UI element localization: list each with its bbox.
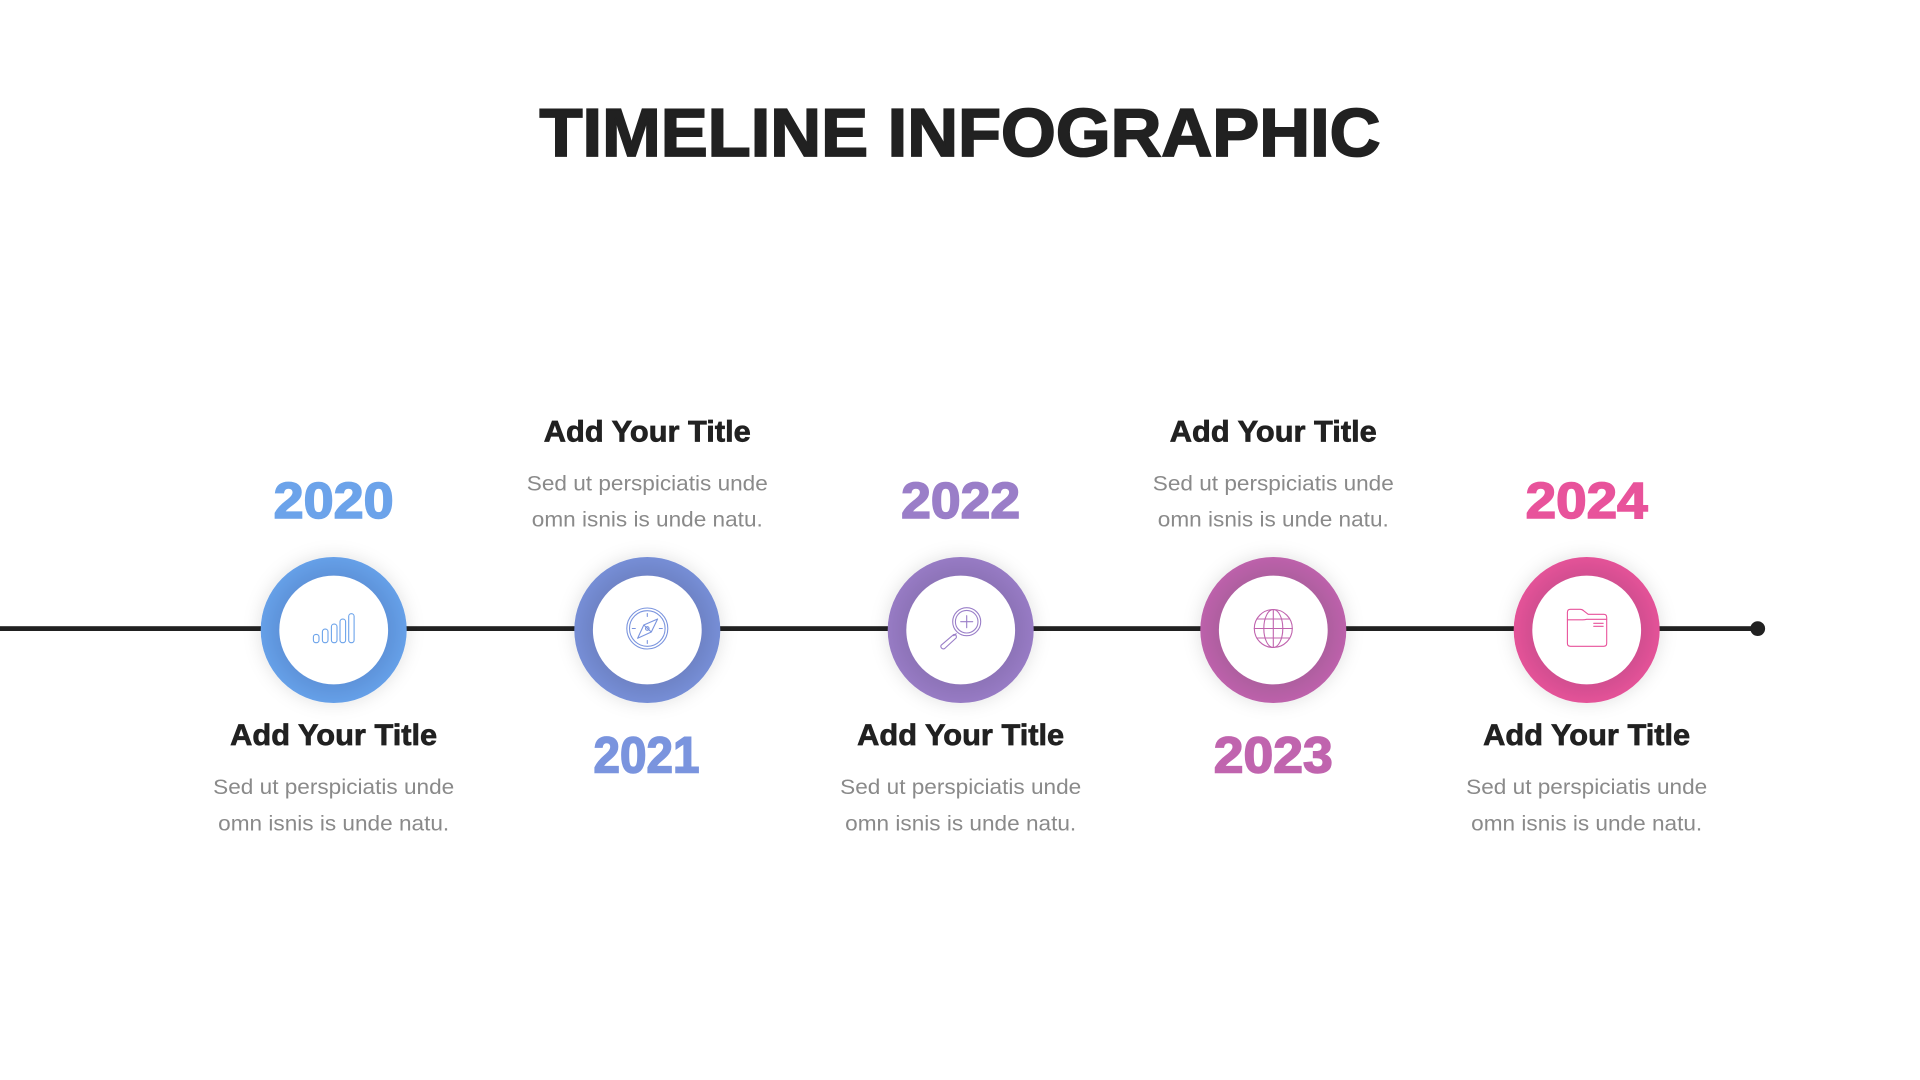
icon: folder xyxy=(1567,609,1607,646)
description: Sed ut perspiciatis unde xyxy=(1153,473,1394,496)
description: omn isnis is unde natu. xyxy=(845,812,1076,836)
description: Sed ut perspiciatis unde xyxy=(527,473,768,496)
year 2022: 2022 xyxy=(901,472,1020,529)
description: Sed ut perspiciatis unde xyxy=(840,776,1081,799)
milestone 2023 xyxy=(1153,416,1394,784)
ring 2021 xyxy=(574,557,720,703)
year 2023: 2023 xyxy=(1214,727,1333,784)
milestone 2024 xyxy=(1466,472,1707,836)
description xyxy=(840,776,1081,836)
icon: globe xyxy=(1254,610,1292,648)
milestone 2020 xyxy=(213,472,454,836)
heading: Add Your Title xyxy=(857,719,1064,752)
year 2021: 2021 xyxy=(594,727,700,784)
description: omn isnis is unde natu. xyxy=(1471,812,1702,836)
year 2024: 2024 xyxy=(1526,472,1648,529)
icon: signal bars xyxy=(313,614,354,643)
icon: compass xyxy=(627,608,668,649)
description: omn isnis is unde natu. xyxy=(1158,509,1389,532)
description xyxy=(527,473,768,532)
icon: magnifier xyxy=(941,608,981,649)
description: omn isnis is unde natu. xyxy=(218,812,449,836)
ring 2024 xyxy=(1514,557,1660,703)
timeline line with end dot xyxy=(0,621,1765,636)
ring 2023 xyxy=(1200,557,1346,703)
year 2020: 2020 xyxy=(274,472,394,529)
title: TIMELINE INFOGRAPHIC xyxy=(540,95,1380,171)
heading: Add Your Title xyxy=(230,719,437,752)
milestone 2021 xyxy=(527,416,768,784)
ring 2022 xyxy=(888,557,1034,703)
description: Sed ut perspiciatis unde xyxy=(1466,776,1707,799)
milestone 2022 xyxy=(840,472,1081,836)
description: Sed ut perspiciatis unde xyxy=(213,776,454,799)
heading: Add Your Title xyxy=(1170,416,1377,449)
description xyxy=(1466,776,1707,836)
heading: Add Your Title xyxy=(1483,719,1690,752)
description xyxy=(1153,473,1394,532)
description: omn isnis is unde natu. xyxy=(532,509,763,532)
description xyxy=(213,776,454,836)
heading: Add Your Title xyxy=(544,416,751,449)
ring 2020 xyxy=(261,557,407,703)
